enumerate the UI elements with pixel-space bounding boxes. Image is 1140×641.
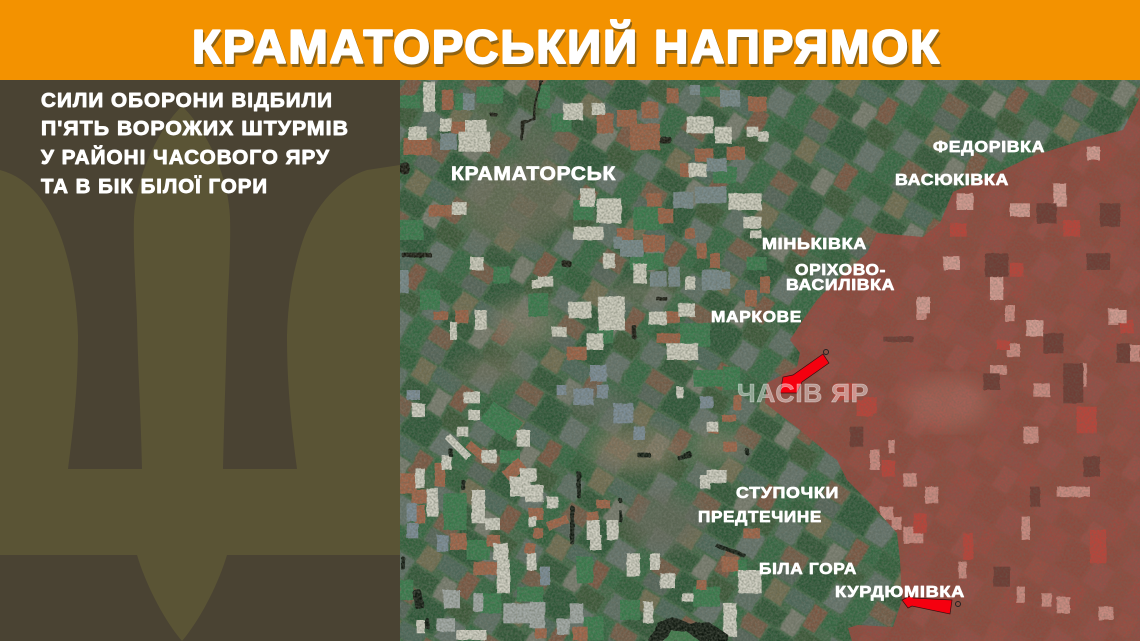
summary text block bbox=[41, 90, 349, 198]
label: Minkivka: МІНЬКІВКА bbox=[762, 236, 867, 253]
fields south-west bbox=[400, 365, 762, 641]
label: Bila Hora: БІЛА ГОРА bbox=[759, 561, 857, 578]
summary text block: У РАЙОНІ ЧАСОВОГО ЯРУ bbox=[41, 145, 330, 169]
summary text block: П'ЯТЬ ВОРОЖИХ ШТУРМІВ bbox=[41, 118, 349, 140]
map base farmland bbox=[395, 75, 1140, 641]
town glow bbox=[905, 377, 989, 429]
towns and bare land bbox=[453, 97, 743, 550]
label: Vasiukivka: ВАСЮКІВКА bbox=[895, 172, 1009, 189]
grain noise bbox=[400, 80, 1140, 641]
label: Orikhovo-: ОРІХОВО- bbox=[795, 262, 886, 279]
label: Fedorivka: ФЕДОРІВКА bbox=[933, 139, 1045, 156]
fields south-east bbox=[850, 300, 1140, 620]
summary text block: ТА В БІК БІЛОЇ ГОРИ bbox=[41, 175, 268, 198]
label: Markove: МАРКОВЕ bbox=[711, 309, 802, 326]
label: Kramatorsk: КРАМАТОРСЬК bbox=[451, 164, 616, 185]
satellite map bbox=[395, 75, 1140, 641]
red zone grain bbox=[760, 90, 1140, 641]
label: Kurdiumivka: КУРДЮМІВКА bbox=[835, 584, 965, 601]
fields north-east bbox=[833, 147, 1127, 413]
map labels bbox=[451, 139, 1045, 601]
summary text block: СИЛИ ОБОРОНИ ВІДБИЛИ bbox=[41, 90, 333, 112]
arrow: attack near Kurdiumivka bbox=[902, 595, 960, 614]
fields north-west bbox=[400, 80, 770, 360]
header bar bbox=[0, 0, 1140, 80]
label: Stupochky: СТУПОЧКИ bbox=[736, 485, 839, 502]
label: Chasiv Yar: ЧАСІВ ЯР bbox=[737, 378, 869, 408]
arrow: attack on Chasiv Yar bbox=[780, 350, 829, 393]
trident emblem watermark bbox=[0, 106, 400, 641]
title: КРАМАТОРСЬКИЙ НАПРЯМОК bbox=[192, 20, 941, 73]
label: Vasylivka: ВАСИЛІВКА bbox=[786, 277, 895, 294]
title: КРАМАТОРСЬКИЙ НАПРЯМОК bbox=[194, 23, 942, 76]
occupied territory overlay bbox=[760, 90, 1140, 641]
label: Predtechyne: ПРЕДТЕЧИНЕ bbox=[698, 509, 822, 526]
